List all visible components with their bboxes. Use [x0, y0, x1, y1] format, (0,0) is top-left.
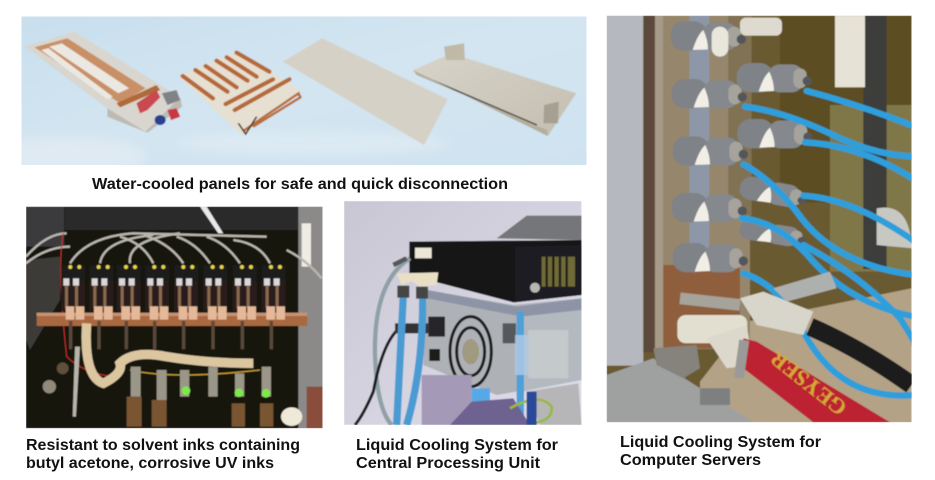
black hose: [810, 327, 912, 385]
tubes: [375, 258, 410, 425]
black box: [409, 240, 582, 302]
panel: server rack liquid cooling photo: [607, 16, 915, 422]
icon: flat aluminium plate: [283, 38, 448, 145]
caption: central processing unit: [356, 437, 558, 472]
caption: solvent inks: [26, 437, 300, 472]
white connectors: [397, 272, 438, 287]
ribbon cable: [86, 323, 253, 383]
red hose with lettering: [743, 338, 890, 422]
head units: [127, 397, 273, 427]
blue fittings: [517, 312, 524, 425]
motherboard: [422, 375, 472, 425]
caption: solvent inks: butyl acetone, corrosive UV inks: [26, 455, 274, 472]
ink modules: [37, 313, 307, 326]
caption: central processing unit: Central Processing Unit: [356, 455, 541, 472]
panel: CPU liquid cooling photo: [344, 201, 582, 425]
copper block: [663, 265, 740, 348]
bottom rail: [607, 358, 753, 422]
green LEDs: [182, 386, 270, 398]
heading: water-cooled panels caption: Water-cooled panels for safe and quick disconnection: [92, 176, 508, 193]
panel: print head ink system photo: [26, 207, 323, 428]
caption: computer servers: Computer Servers: [620, 452, 761, 469]
caption: computer servers: Liquid Cooling System for: [620, 434, 821, 451]
caption: solvent inks: Resistant to solvent inks containing: [26, 437, 300, 454]
fan: [450, 317, 491, 387]
caption: computer servers: [620, 434, 821, 469]
rack rail: [863, 16, 887, 269]
blue tubes: [742, 91, 915, 396]
icon: open panel with copper channels and red connectors: [24, 32, 182, 133]
icon: copper tube cold plate: [178, 52, 300, 135]
caption: central processing unit: Liquid Cooling System for: [356, 437, 558, 454]
panel: water-cooled panels photo: [22, 16, 586, 165]
white tube bundle: [26, 233, 322, 278]
icon: aluminium plate with mounting blocks: [413, 43, 576, 136]
PSU: [423, 290, 582, 395]
panel: server rack liquid cooling photo: GEYSER: [764, 345, 851, 421]
fittings: [740, 18, 782, 36]
white connectors: [740, 292, 813, 335]
